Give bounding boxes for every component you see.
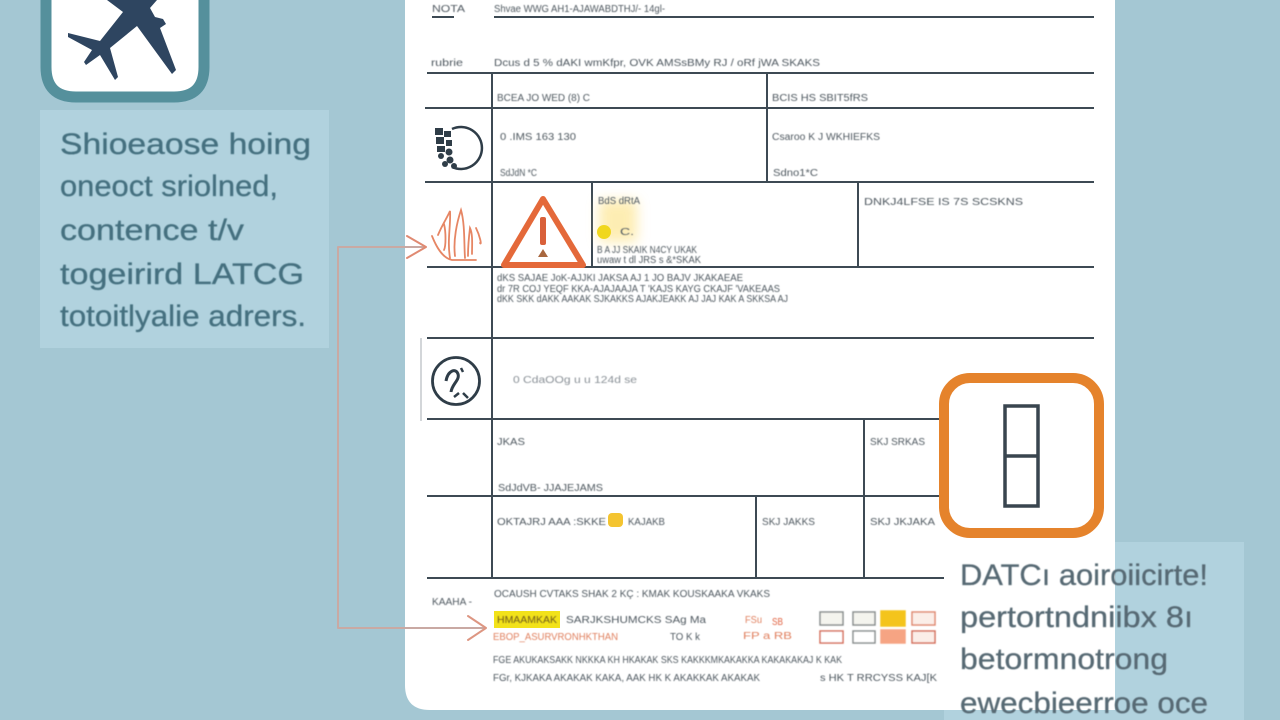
row text: warning cells: C. (620, 227, 634, 238)
footer section: FSu (745, 615, 762, 626)
icon: warning triangle (504, 199, 583, 265)
header row text: BCIS HS SBIT5fRS (772, 93, 868, 104)
row text: ratings (500, 132, 880, 179)
icon: airplane badge (46, 0, 204, 97)
footer section (432, 589, 937, 684)
arrow: connector from note to document (338, 236, 486, 640)
row text: warning cells: dKK SKK dAKK AAKAK SJKAKKS AJAKJEAKK AJ JAJ KAK A SKKSA AJ (497, 294, 788, 305)
footer section: EBOP_ASURVRONHKTHAN (493, 632, 618, 643)
footer section: FGE AKUKAKSAKK NKKKA KH HKAKAK SKS KAKKKMKAKAKKA KAKAKAKAJ K KAK (493, 655, 842, 666)
callout: left note: contence t/v (60, 214, 244, 247)
callout: left note: totoitlyalie adrers. (60, 300, 306, 333)
row text: ratings: SdJdN *C (500, 168, 537, 179)
icon: speckled circle (435, 127, 482, 169)
callout: left note: Shioeaose hoing (60, 128, 311, 161)
header row text: rubrie (431, 58, 464, 69)
icon: flame (432, 210, 481, 260)
footer section: SARJKSHUMCKS SAg Ma (566, 615, 706, 626)
row text: ratings: 0 .IMS 163 130 (500, 132, 576, 143)
callout: right note: pertortndniibx 8ı (960, 601, 1193, 634)
row text: lower cells: OKTAJRJ AAA :SKKE (497, 517, 606, 528)
row text: lower cells: SKJ JKJAKA (870, 517, 935, 528)
row text: warning cells: dr 7R COJ YEQF KKA-AJAJAAJA T 'KAJS KAYG CKAJF 'VAKEAAS (497, 284, 780, 295)
table grid (421, 17, 1094, 578)
row text: lower cells: 0 CdaOOg u u 124d se (513, 375, 638, 386)
row text: warning cells: dKS SAJAE JoK-AJJKI JAKSA AJ 1 JO BAJV JKAKAEAE (497, 273, 743, 284)
header row text (431, 4, 868, 104)
callout: right note (944, 542, 1244, 720)
header row text: Dcus d 5 % dAKI wmKfpr, OVK AMSsBMy RJ / oRf jWA SKAKS (494, 58, 820, 69)
icon: airplane (68, 0, 176, 80)
callout: left note: oneoct sriolned, (60, 170, 278, 203)
callout: left note (40, 110, 329, 348)
row text: ratings: Csaroo K J WKHIEFKS (772, 132, 880, 143)
row text: warning cells: DNKJ4LFSE IS 7S SCSKNS (864, 197, 1023, 208)
footer section: TO K k (670, 632, 701, 643)
icon: ear circle (432, 358, 480, 404)
row text: lower cells: SdJdVB- JJAJEJAMS (498, 483, 603, 494)
footer section: KAAHA - (432, 597, 472, 608)
row text: warning cells: uwaw t dl JRS s &*SKAK (597, 255, 701, 266)
row text: lower cells (497, 375, 935, 528)
row text: lower cells: JKAS (497, 437, 525, 448)
footer section: OCAUSH CVTAKS SHAK 2 KÇ : KMAK KOUSKAAKA VKAKS (494, 589, 770, 600)
row text: warning cells: B A JJ SKAIK N4CY UKAK (597, 245, 697, 256)
footer section: FP a RB (743, 631, 792, 642)
footer section: SB (772, 617, 783, 628)
icon: orange document badge (944, 378, 1099, 533)
row text: warning cells (497, 196, 1023, 305)
footer section: HMAAMKAK (497, 615, 557, 626)
callout: right note: DATCı aoiroiicirte! (960, 559, 1208, 592)
callout: left note: togeirird LATCG (60, 258, 304, 291)
row text: lower cells: SKJ JAKKS (762, 517, 815, 528)
row text: lower cells: KAJAKB (628, 517, 665, 528)
row text: ratings: Sdno1*C (773, 168, 818, 179)
rating boxes (820, 611, 935, 643)
row text: lower cells: SKJ SRKAS (870, 437, 925, 448)
highlight: yellow glow (597, 200, 637, 242)
header row text: Shvae WWG AH1-AJAWABDTHJ/- 14gl- (494, 4, 665, 15)
row text: warning cells: BdS dRtA (598, 196, 640, 207)
header row text: NOTA (432, 4, 465, 15)
header row text: BCEA JO WED (8) C (497, 93, 590, 104)
callout: right note: betormnotrong (960, 643, 1168, 676)
footer section: FGr, KJKAKA AKAKAK KAKA, AAK HK K AKAKKAK AKAKAK (493, 673, 760, 684)
footer section: s HK T RRCYSS KAJ[K (820, 673, 937, 684)
panel: document sheet (405, 0, 1115, 710)
callout: right note: ewecbieerroe oce (960, 687, 1208, 720)
